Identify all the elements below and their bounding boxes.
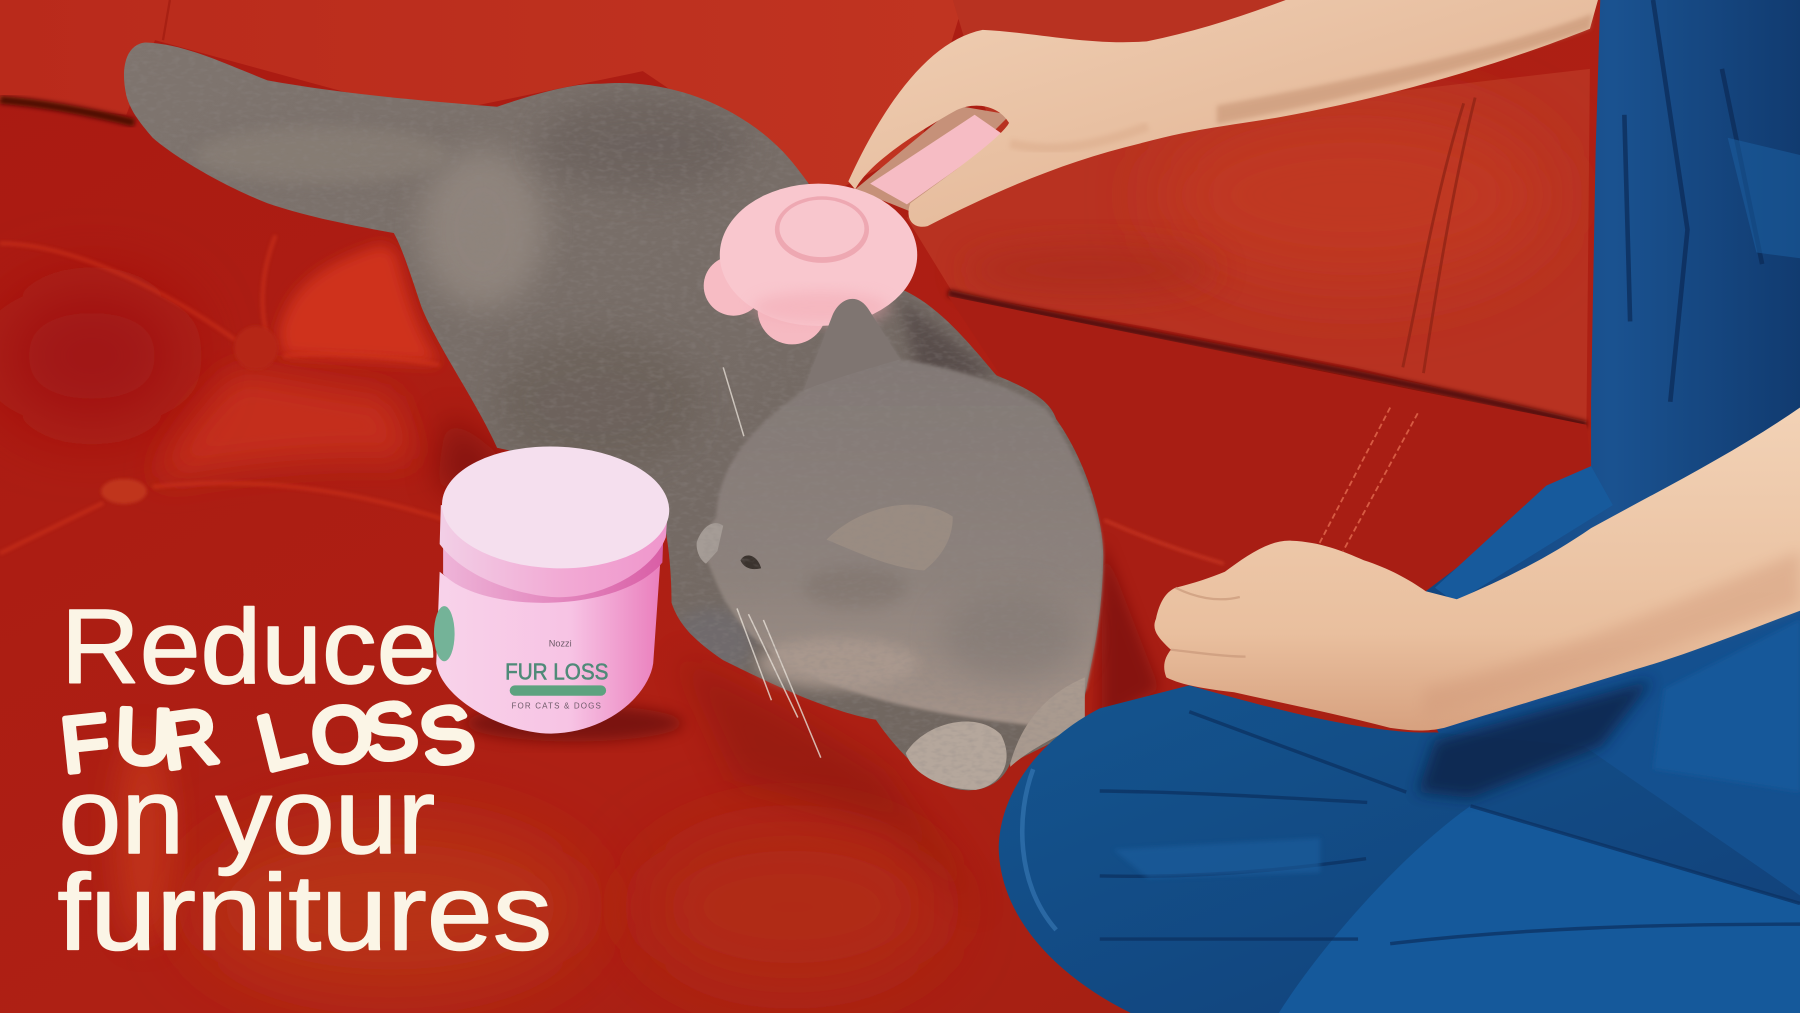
person: shirt [1426, 0, 1800, 643]
sofa: upper left backrest [0, 0, 964, 195]
second tuft wedge [155, 371, 413, 480]
jar: lid [440, 505, 668, 597]
cat: head and chest [697, 299, 1103, 726]
cat: face details [697, 367, 821, 758]
headline [57, 588, 552, 972]
jar: green badge [434, 606, 455, 661]
cat: body and tail [124, 42, 1103, 790]
brush: shadow behind the fingers [855, 106, 1010, 212]
jar: body [436, 565, 660, 734]
sofa: right seat cushion [948, 296, 1591, 735]
jar: product name: FUR LOSS [505, 659, 608, 685]
jar: green label pill [510, 685, 606, 696]
bright tuft wedge [279, 245, 440, 364]
jar: neck groove [443, 530, 664, 603]
jar: brand: Nozzi [549, 638, 572, 648]
trousers: dark crotch fold [1418, 680, 1653, 798]
brush [704, 106, 1010, 344]
headline: on your: on your [59, 755, 435, 876]
jar: small caption: FOR CATS & DOGS [511, 701, 602, 710]
fur texture [115, 34, 1114, 804]
person: upper arm and hand holding the brush [848, 0, 1598, 227]
jar: shadow [465, 705, 683, 742]
product jar [434, 443, 683, 742]
cat: front paw [906, 677, 1085, 790]
bright velvet ridges [0, 235, 442, 553]
cat: folded ear [827, 505, 953, 571]
person: lower arm and resting hand [1154, 408, 1800, 730]
jar: lid top [440, 443, 671, 572]
sofa: right backrest cushion [907, 0, 1590, 425]
cat: upright ear [804, 299, 900, 390]
person: trousers and shirt hem [999, 608, 1800, 1013]
headline: furnitures: furnitures [57, 851, 552, 972]
headline: handwritten FUR LOSS: FUR LOSS [57, 683, 481, 790]
headline: Reduce: Reduce [61, 588, 437, 706]
trousers: lower leg [1279, 806, 1800, 1013]
